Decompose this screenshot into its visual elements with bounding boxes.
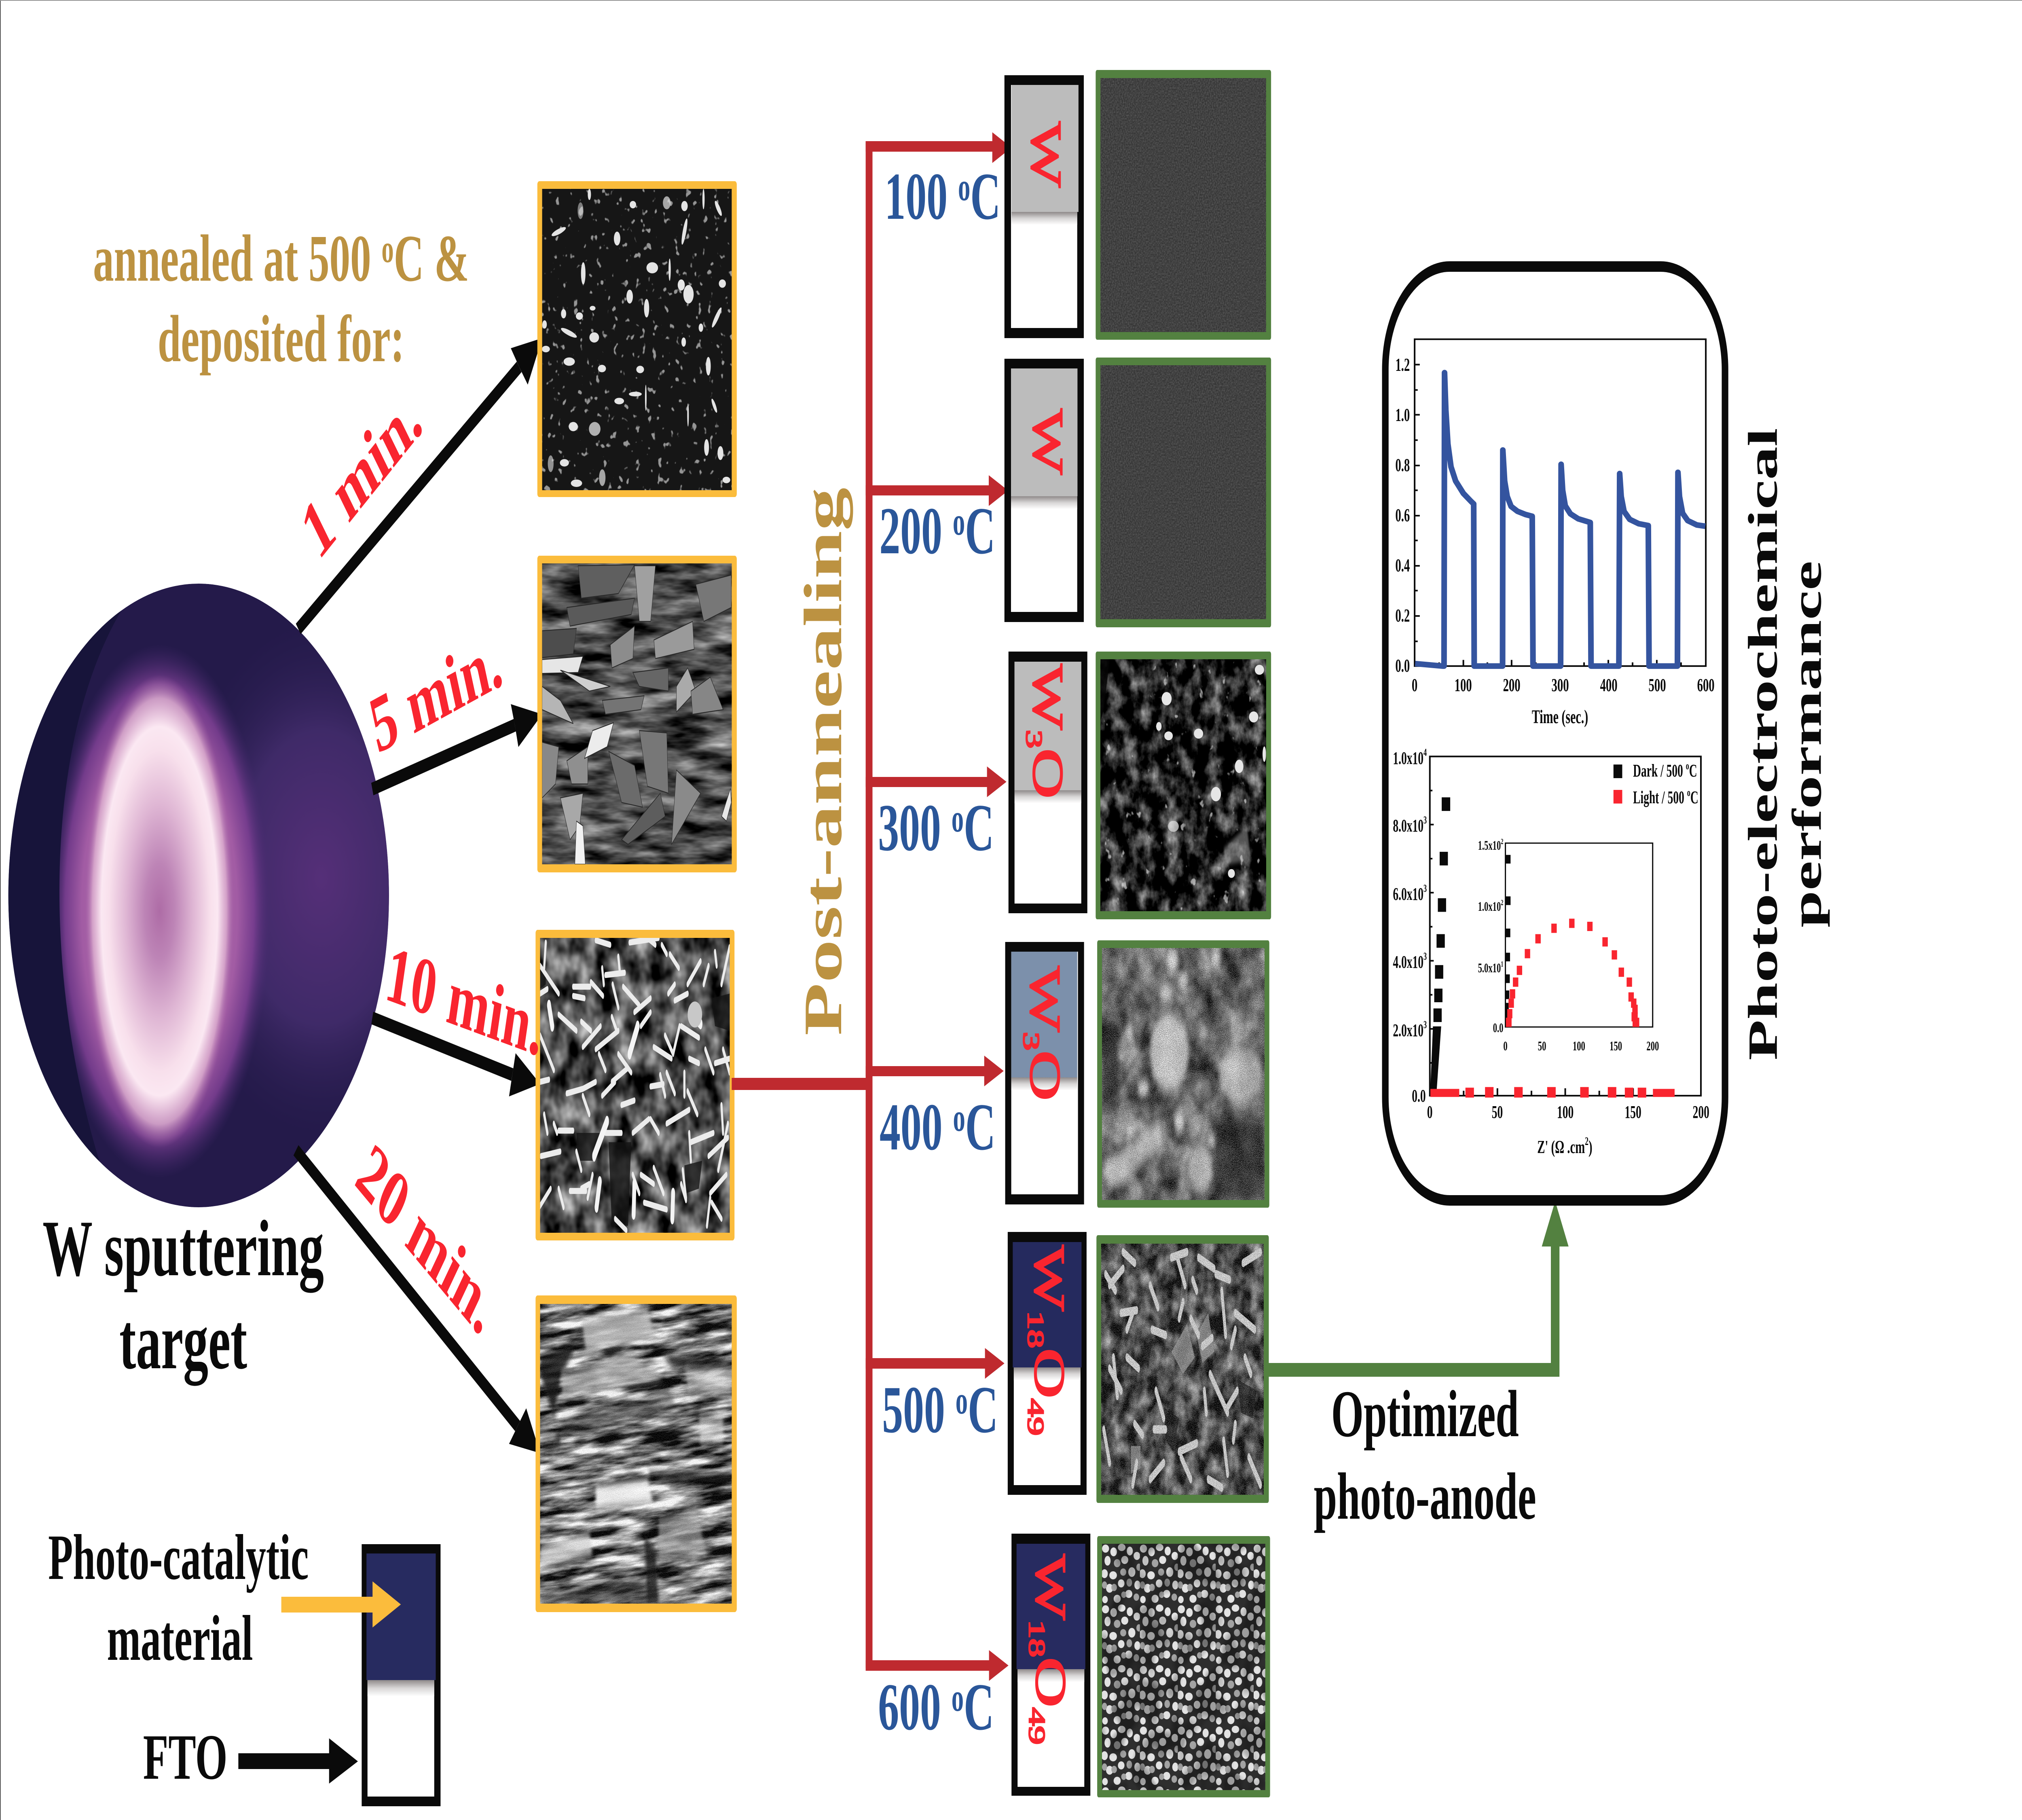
label: Optimized photo-anode: photo-anode xyxy=(1314,1459,1536,1533)
panel: SEM 5 min xyxy=(537,556,737,872)
axis labels: Nyquist chart: ) xyxy=(1588,1137,1593,1158)
axis labels: Nyquist chart: 50 xyxy=(1492,1102,1503,1122)
label: 100 C: C xyxy=(970,159,1000,233)
label: photo-catalytic material: Photo-catalytic xyxy=(48,1521,309,1593)
axis labels: inset: 100 xyxy=(1573,1038,1585,1053)
arrow: to 200 C xyxy=(866,475,1008,506)
legend: photo-catalytic material and FTO xyxy=(48,1521,440,1806)
electrode: 400 C W3O film: O xyxy=(1021,1050,1069,1101)
axis labels: inset: 2 xyxy=(1501,898,1504,907)
heading: annealed and deposited: annealed at 500 xyxy=(93,221,371,295)
label: 300 C: C xyxy=(964,790,994,865)
electrode: 400 C W3O film: 3 xyxy=(1019,1032,1044,1050)
arrow: target to 5 min xyxy=(372,704,542,789)
axis labels: Nyquist chart: 3 xyxy=(1423,814,1427,826)
panel: SEM 100 C xyxy=(1096,70,1271,340)
electrode: 600 C W18O49 film: 49 xyxy=(1024,1708,1050,1745)
panel: SEM 10 min xyxy=(535,930,734,1240)
axis labels: Nyquist chart: 2 xyxy=(1585,1135,1588,1148)
electrode: 100 C W film: W xyxy=(1022,122,1070,188)
panel: SEM 20 min xyxy=(518,1219,751,1693)
panel: SEM 200 C xyxy=(1096,358,1271,627)
panel: SEM 1 min xyxy=(537,181,737,497)
axis labels: time chart: 100 xyxy=(1455,675,1472,696)
axis labels: Nyquist chart: 4 xyxy=(1423,747,1427,758)
arrow: target to 20 min xyxy=(296,1150,540,1453)
label: photo-catalytic material xyxy=(48,1521,309,1674)
label: 400 C: C xyxy=(965,1090,996,1164)
label: 1 min: 1 min. xyxy=(291,372,431,576)
label: 100 C: 100 xyxy=(885,159,948,233)
axis labels: time chart: 0 xyxy=(1412,675,1417,696)
label: W sputtering target: target xyxy=(119,1297,247,1386)
label: 300 C: o xyxy=(952,797,964,840)
label: Optimized photo-anode: Optimized xyxy=(1331,1376,1519,1451)
arrow: black to FTO xyxy=(238,1738,358,1784)
label: 10 min: 10 min. xyxy=(381,929,549,1073)
label: 500 C: C xyxy=(968,1372,998,1447)
axis labels: inset: 200 xyxy=(1646,1038,1659,1053)
electrode: 300 C W3O film: O xyxy=(1024,748,1072,799)
panel: SEM 300 C xyxy=(1096,652,1271,919)
chart: photocurrent versus time xyxy=(1395,339,1715,728)
axis labels: Nyquist chart: 3 xyxy=(1423,1019,1427,1031)
electrode: 600 C W18O49 film xyxy=(1011,1534,1090,1796)
axis labels: time chart: 1.0 xyxy=(1395,405,1410,425)
axis labels: Nyquist chart: 150 xyxy=(1625,1102,1641,1122)
axis labels: inset: 0 xyxy=(1503,1038,1508,1053)
axis labels: Nyquist chart: 2.0x10 xyxy=(1393,1020,1423,1040)
axis labels: Nyquist chart: C xyxy=(1690,787,1698,807)
panel: SEM 400 C xyxy=(1097,940,1269,1208)
axis labels: time chart: Time (sec.) xyxy=(1532,706,1588,728)
axis labels: time chart: 500 xyxy=(1649,675,1666,696)
electrode: 200 C W film: W xyxy=(1024,409,1072,475)
data: light series xyxy=(1430,1087,1675,1098)
label: 600 C: 600 xyxy=(878,1670,941,1744)
arrow: to 400 C xyxy=(866,1056,1004,1086)
heading: annealed and deposited: o xyxy=(381,228,394,271)
axis labels: time chart: 300 xyxy=(1552,675,1569,696)
panel: photo-electrochemical performance frame xyxy=(1385,267,1725,1200)
electrode: 500 C W18O49 film: O xyxy=(1025,1348,1074,1399)
axis labels: Nyquist chart: o xyxy=(1687,787,1690,798)
axis labels: Nyquist chart: 3 xyxy=(1423,882,1427,894)
arrow network: post-annealing branches xyxy=(732,132,1011,1681)
heading: Photo-electrochemical performance: performance xyxy=(1783,561,1830,928)
axis labels: Nyquist chart: 0 xyxy=(1427,1102,1432,1122)
arrow: target to 1 min xyxy=(298,338,542,629)
electrode: 600 C W18O49 film: W xyxy=(1027,1554,1075,1620)
axis labels: inset xyxy=(1478,837,1659,1053)
data: dark series xyxy=(1430,797,1450,1096)
axis labels: time chart: 0.2 xyxy=(1395,605,1410,626)
panel: SEM 500 C optimized xyxy=(1096,1235,1269,1503)
electrode: 300 C W3O film: 3 xyxy=(1021,730,1047,748)
axis labels: Nyquist chart: C xyxy=(1689,760,1697,781)
label: 300 C: 300 xyxy=(878,790,941,865)
icon: W sputtering target plasma disc xyxy=(8,584,389,1207)
electrode: 500 C W18O49 film: W xyxy=(1025,1245,1074,1311)
electrode: 600 C W18O49 film: 18 xyxy=(1024,1620,1050,1657)
electrode: 500 C W18O49 film: 18 xyxy=(1023,1311,1049,1348)
axis labels: inset: 50 xyxy=(1538,1038,1546,1053)
axis labels: Nyquist chart: 3 xyxy=(1423,950,1427,962)
arrow: to 300 C xyxy=(866,766,1007,797)
label: 600 C: C xyxy=(964,1670,994,1744)
electrode: 300 C W3O film: W xyxy=(1024,664,1072,730)
label: FTO: FTO xyxy=(143,1721,228,1793)
arrow: to 600 C xyxy=(866,1650,1009,1681)
label: 5 min: 5 min. xyxy=(363,616,508,771)
label: 200 C: 200 xyxy=(879,493,942,568)
label: 500 C: o xyxy=(956,1379,968,1422)
axis labels: inset: 5.0x10 xyxy=(1478,960,1501,975)
heading: annealed and deposited: deposited for: xyxy=(158,301,404,376)
axis labels: time chart: 0.6 xyxy=(1395,505,1410,526)
label: 200 C: C xyxy=(965,493,995,568)
label: 400 C: o xyxy=(953,1096,965,1140)
label: 20 min: 20 min. xyxy=(346,1126,508,1352)
axis labels: inset: 2 xyxy=(1501,837,1504,846)
label: 100 C: o xyxy=(958,166,970,209)
axis labels: time chart xyxy=(1395,355,1715,728)
arrow: target to 10 min xyxy=(372,1018,540,1096)
legend markers xyxy=(1614,764,1622,804)
inset plot frame xyxy=(1505,843,1653,1027)
axis labels: Nyquist chart: 100 xyxy=(1557,1102,1574,1122)
axis labels: time chart: 400 xyxy=(1600,675,1618,696)
axis labels: Nyquist chart: 4.0x10 xyxy=(1393,952,1423,972)
label: 600 C: o xyxy=(952,1676,964,1720)
arrow: to 100 C xyxy=(866,132,1011,163)
axis labels: Nyquist chart: Dark / 500 xyxy=(1633,760,1683,781)
heading: Photo-electrochemical performance xyxy=(1740,428,1830,1060)
heading: annealed and deposited: C & xyxy=(394,221,469,295)
electrode: 500 C W18O49 film: 49 xyxy=(1023,1399,1049,1436)
axis labels: Nyquist chart: Z' (Ω .cm xyxy=(1537,1137,1585,1158)
label: W sputtering target: W sputtering xyxy=(42,1204,324,1293)
label: W sputtering target xyxy=(42,1204,324,1386)
chart: Nyquist impedance plot xyxy=(1393,747,1709,1158)
axis labels: Nyquist chart xyxy=(1393,747,1709,1158)
heading: Photo-electrochemical performance: Photo-electrochemical xyxy=(1740,428,1786,1060)
label: 500 C: 500 xyxy=(882,1372,945,1447)
axis labels: time chart: 0.8 xyxy=(1395,455,1410,476)
electrode: 400 C W3O film: W xyxy=(1021,966,1069,1032)
axis labels: Nyquist chart: 8.0x10 xyxy=(1393,815,1423,836)
label: photo-catalytic material: material xyxy=(107,1602,253,1674)
axis labels: time chart: 200 xyxy=(1503,675,1521,696)
axis labels: Nyquist chart: 1.0x10 xyxy=(1393,748,1423,768)
electrode: 400 C W3O film xyxy=(1005,942,1084,1204)
panel: SEM 600 C xyxy=(1097,1536,1270,1797)
axis labels: time chart: 0.4 xyxy=(1395,555,1410,576)
axis labels: inset: 1.0x10 xyxy=(1478,899,1501,914)
axis labels: time chart: 600 xyxy=(1697,675,1715,696)
axis labels: Nyquist chart: 0.0 xyxy=(1412,1086,1426,1106)
electrode: 300 C W3O film xyxy=(1009,652,1087,913)
axis labels: inset: 0.0 xyxy=(1493,1020,1504,1035)
axis labels: Nyquist chart: 200 xyxy=(1693,1102,1709,1122)
axis labels: Nyquist chart: 6.0x10 xyxy=(1393,884,1423,904)
axis labels: Nyquist chart: o xyxy=(1686,760,1689,772)
electrode: 600 C W18O49 film: O xyxy=(1027,1657,1075,1708)
label: Optimized photo-anode xyxy=(1314,1376,1536,1533)
icon: legend electrode xyxy=(362,1544,440,1806)
heading: Post-annealing: Post-annealing xyxy=(793,487,853,1036)
axis labels: inset: 1 xyxy=(1501,959,1504,969)
electrode: 100 C W film xyxy=(1005,75,1084,338)
axis labels: time chart: 0.0 xyxy=(1395,656,1410,676)
label: 200 C: o xyxy=(953,500,965,544)
electrode: 500 C W18O49 film xyxy=(1008,1232,1087,1495)
heading: annealed and deposited xyxy=(93,221,469,376)
arrow: to 500 C xyxy=(866,1348,1005,1379)
axis labels: Nyquist chart: Light / 500 xyxy=(1633,787,1684,807)
axis labels: inset: 150 xyxy=(1610,1038,1622,1053)
label: 400 C: 400 xyxy=(880,1090,943,1164)
electrode: 200 C W film xyxy=(1005,359,1084,622)
arrow: yellow to photo-catalytic layer xyxy=(281,1581,401,1627)
axis labels: inset: 1.5x10 xyxy=(1478,838,1501,853)
axis labels: time chart: 1.2 xyxy=(1395,355,1410,375)
connector: optimized anode to performance frame xyxy=(1269,1201,1569,1377)
